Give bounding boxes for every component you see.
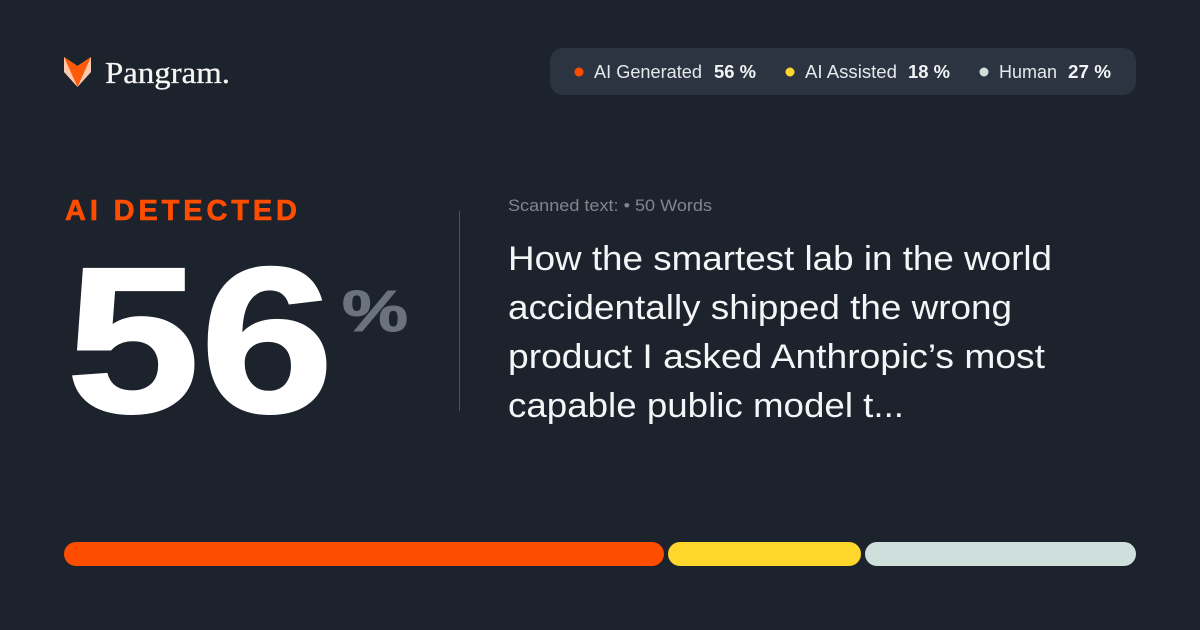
scanned text excerpt: product I asked Anthropic’s most (508, 338, 1046, 376)
scanned text excerpt: How the smartest lab in the world (508, 240, 1052, 278)
bar segment: Human 27% (865, 542, 1136, 566)
legend: Human (980, 62, 1111, 82)
stacked progress bar (64, 542, 1136, 566)
wordmark: Pangram. (105, 55, 230, 90)
legend pill (550, 48, 1136, 95)
scanned text excerpt: accidentally shipped the wrong (508, 289, 1012, 327)
scanned text label: Scanned text: • 50 Words (508, 196, 712, 215)
logo: Pangram (64, 55, 230, 90)
percent sign: % (342, 279, 408, 344)
heading: AI detected: AI DETECTED (65, 195, 297, 227)
legend: AI Assisted (786, 62, 950, 82)
legend: AI Assisted: AI Assisted (805, 62, 897, 82)
icon: fox head (64, 57, 91, 87)
legend: AI Assisted: 18 % (908, 62, 950, 82)
scanned text excerpt: capable public model t... (508, 387, 904, 425)
legend: AI Generated: AI Generated (594, 62, 702, 82)
legend: AI Generated (574, 62, 756, 82)
big number: 56: 56 (66, 225, 334, 457)
legend: Human: 27 % (1068, 62, 1111, 82)
legend: Human: Human (999, 62, 1057, 82)
scanned text excerpt (508, 240, 1052, 425)
legend: AI Generated: 56 % (714, 62, 756, 82)
bar segment: AI Assisted 18% (668, 542, 861, 566)
bar segment: AI Generated 56% (64, 542, 664, 566)
